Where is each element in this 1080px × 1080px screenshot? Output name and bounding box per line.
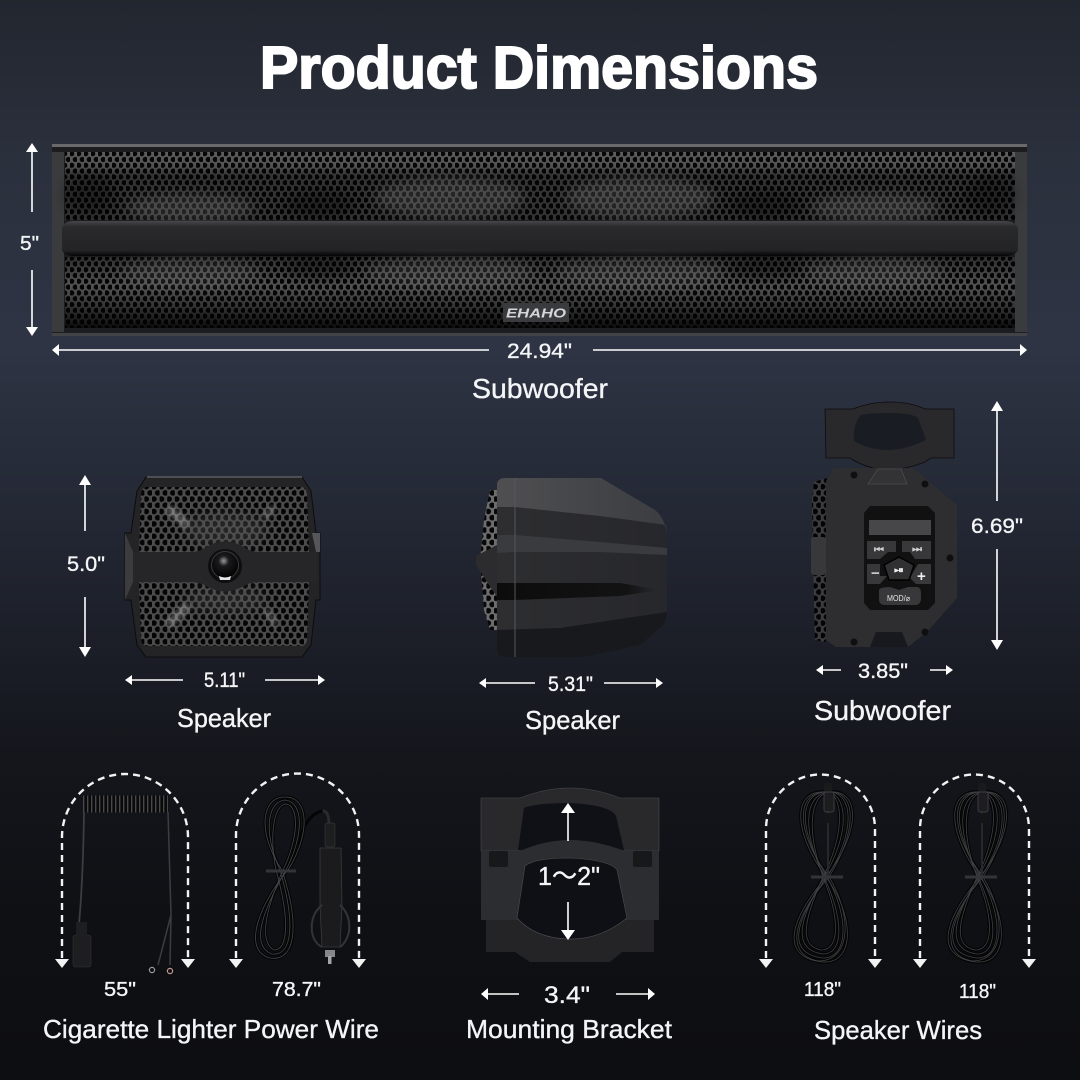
width arrow: speaker 5.31 inches: 5.31" xyxy=(548,673,593,696)
product: subwoofer control unit xyxy=(811,402,957,647)
label: Cigarette Lighter Power Wire: Cigarette Lighter Power Wire xyxy=(43,1014,379,1044)
top grille xyxy=(65,152,1015,222)
width arrow: speaker 5.11 inches xyxy=(125,669,325,692)
product: speaker front view xyxy=(125,477,320,657)
arrows and label: bracket 1 to 2 inches xyxy=(538,803,600,940)
control panel: MOD/⌀ xyxy=(887,594,910,603)
brand badge: EHAHO xyxy=(506,306,566,320)
label: 118 inches first: 118" xyxy=(804,979,841,1001)
front clamp xyxy=(481,840,659,920)
height arrow: speaker 5.0 inches: 5.0" xyxy=(67,553,105,576)
width arrow: speaker 5.11 inches: 5.11" xyxy=(204,669,245,692)
body xyxy=(497,478,667,657)
height arrow: control unit 6.69 inches xyxy=(971,401,1023,650)
control panel xyxy=(864,506,935,610)
width arrow: speaker 5.31 inches xyxy=(479,673,663,696)
width arrow: bracket 3.4 inches: 3.4" xyxy=(544,982,590,1009)
arc: speaker wire 2 length xyxy=(913,774,1036,968)
control panel: ⏮ xyxy=(874,544,884,554)
arc: 55 inch coil wire length xyxy=(55,774,195,968)
product: speaker wire 1 xyxy=(794,783,853,962)
product: long subwoofer soundbar xyxy=(52,144,1027,336)
arc: 78.7 inch wire length xyxy=(229,774,366,968)
front mesh xyxy=(480,490,498,630)
vertical seam xyxy=(514,478,516,657)
label: Subwoofer control unit: Subwoofer xyxy=(814,695,951,726)
control panel: ⏯ xyxy=(894,565,904,575)
centre band with knob xyxy=(125,533,320,600)
label: Speaker Wires: Speaker Wires xyxy=(814,1015,982,1045)
product: cigarette lighter plug and wire xyxy=(256,797,349,964)
height arrow: speaker 5.0 inches xyxy=(67,475,105,657)
lower plate xyxy=(486,920,654,962)
height arrow: control unit 6.69 inches: 6.69" xyxy=(971,515,1023,538)
side grille xyxy=(811,478,827,642)
width arrow: bracket 3.4 inches xyxy=(481,982,655,1009)
product: coiled cigarette lighter socket wire xyxy=(73,804,173,974)
mount clamp xyxy=(825,402,954,470)
height arrow: soundbar 5 inches: 5" xyxy=(20,233,39,255)
product: mounting bracket xyxy=(481,788,659,962)
label: 78.7 inches: 78.7" xyxy=(272,979,321,1001)
label: 118 inches second: 118" xyxy=(959,981,996,1003)
bottom grille xyxy=(65,256,1015,328)
bottom dark facet xyxy=(497,612,667,657)
black stripe xyxy=(497,583,660,600)
top facet xyxy=(497,478,667,535)
arrows and label: bracket 1 to 2 inches: 1～2" xyxy=(538,861,600,891)
control panel: ⏭ xyxy=(912,544,923,554)
width arrow: soundbar 24.94 inches: 24.94" xyxy=(507,340,572,363)
width arrow: control unit 3.85 inches: 3.85" xyxy=(858,660,908,683)
label: Speaker side: Speaker xyxy=(525,705,620,735)
label: 55 inches: 55" xyxy=(104,979,136,1001)
back plate xyxy=(481,788,659,851)
mid light facet xyxy=(497,535,667,555)
title: Product Dimensions xyxy=(260,35,818,101)
body xyxy=(826,468,957,647)
label: Mounting Bracket: Mounting Bracket xyxy=(466,1014,673,1044)
brand badge xyxy=(503,303,569,322)
label: Subwoofer: Subwoofer xyxy=(472,373,608,404)
product: speaker side view xyxy=(476,478,667,657)
control panel: − xyxy=(871,565,880,582)
upper speaker mesh xyxy=(139,487,309,552)
product: speaker wire 2 xyxy=(948,783,1007,962)
width arrow: soundbar 24.94 inches xyxy=(52,340,1027,363)
lower speaker mesh xyxy=(139,582,309,646)
width arrow: control unit 3.85 inches xyxy=(816,660,953,683)
control panel: + xyxy=(917,568,926,585)
label: Speaker: Speaker xyxy=(177,703,271,733)
centre band xyxy=(62,221,1018,256)
height arrow: soundbar 5 inches xyxy=(20,143,39,336)
arc: speaker wire 1 length xyxy=(759,774,882,968)
